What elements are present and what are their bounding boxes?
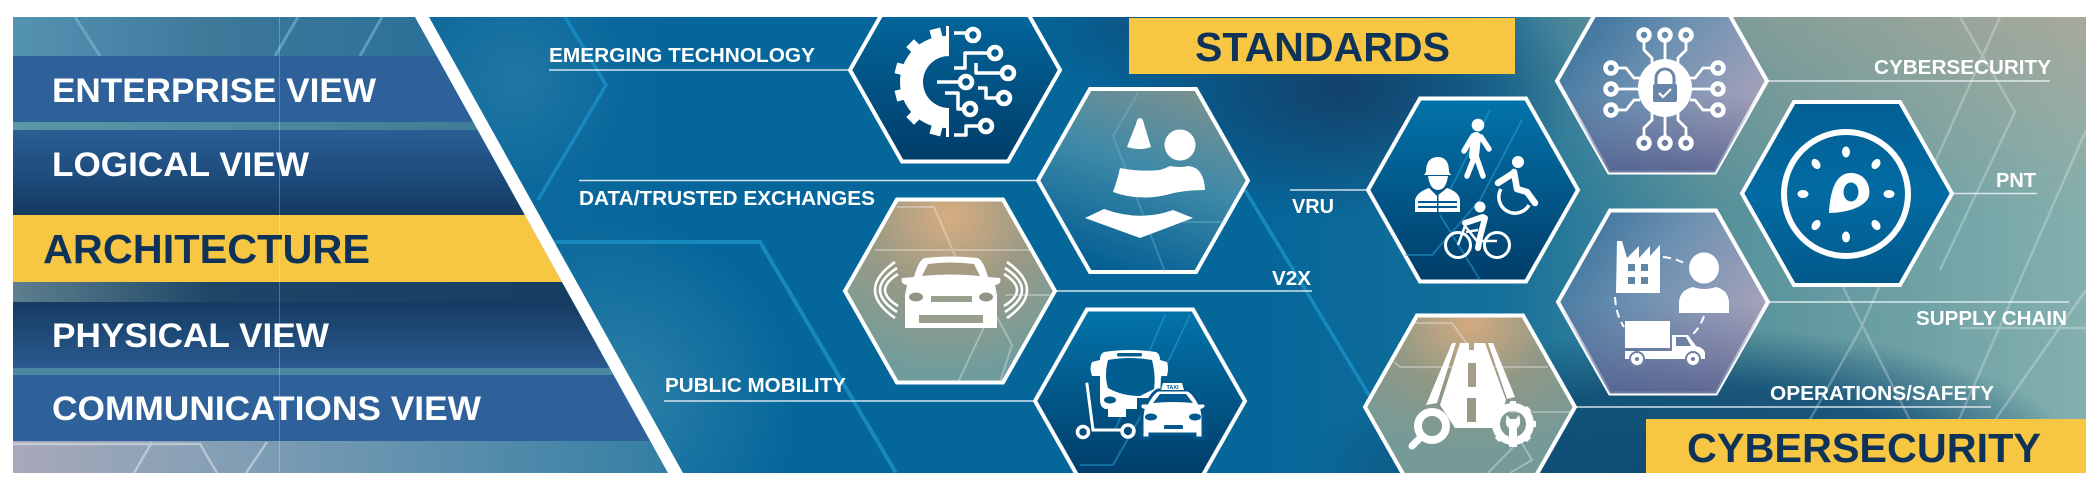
label: data/trusted exchanges: DATA/TRUSTED EXCHANGES bbox=[579, 187, 875, 210]
bar: communications view bbox=[13, 375, 693, 441]
hexagon: operations and safety bbox=[1365, 316, 1575, 476]
label: vru bbox=[1290, 189, 1366, 213]
callout: standards bbox=[1129, 18, 1515, 74]
callout: standards: STANDARDS bbox=[1195, 24, 1450, 70]
pedestrian bbox=[1464, 119, 1489, 176]
hexagon: cybersecurity bbox=[1557, 14, 1767, 172]
icon: factory, person, truck bbox=[1615, 241, 1729, 366]
hexagon: data / trusted exchanges bbox=[1038, 89, 1248, 272]
bar: enterprise view bbox=[13, 56, 473, 122]
label: vru: VRU bbox=[1292, 195, 1334, 218]
label: pnt bbox=[1954, 173, 2037, 194]
hexagon: emerging technology bbox=[850, 14, 1060, 162]
label: supply chain: SUPPLY CHAIN bbox=[1916, 307, 2067, 330]
cyclist bbox=[1446, 202, 1510, 258]
heading: enterprise view: ENTERPRISE VIEW bbox=[52, 72, 377, 110]
label: cybersecurity: CYBERSECURITY bbox=[1874, 56, 2051, 79]
construction worker bbox=[1415, 157, 1460, 212]
panel: background bbox=[415, 17, 2086, 473]
hexagon: supply chain bbox=[1558, 210, 1768, 394]
divider: white diagonal bbox=[415, 17, 683, 473]
hexagon: vru bbox=[1368, 98, 1578, 282]
hexagon: v2x bbox=[845, 200, 1055, 382]
heading: logical view: LOGICAL VIEW bbox=[52, 146, 310, 184]
icon: bus, taxi and scooter bbox=[1078, 350, 1206, 438]
heading: physical view: PHYSICAL VIEW bbox=[52, 317, 330, 355]
hexagon: pnt bbox=[1742, 102, 1952, 285]
icon: connected car bbox=[875, 256, 1027, 328]
icon: vulnerable road users bbox=[1415, 119, 1535, 258]
scooter bbox=[1078, 384, 1134, 438]
icon: circuit lock bbox=[1606, 30, 1724, 148]
label: emerging technology: EMERGING TECHNOLOGY bbox=[549, 44, 815, 67]
bar: logical view bbox=[13, 130, 525, 215]
icon: gear with circuit bbox=[896, 26, 1014, 137]
label: v2x: V2X bbox=[1272, 267, 1311, 290]
heading: communications view: COMMUNICATIONS VIEW bbox=[52, 390, 482, 428]
callout: cybersecurity: CYBERSECURITY bbox=[1687, 425, 2041, 471]
panel: architecture views bbox=[13, 17, 693, 473]
bus bbox=[1090, 350, 1168, 417]
icon: data and person bbox=[1085, 118, 1205, 238]
bar: architecture bbox=[13, 215, 562, 282]
bar: physical view bbox=[13, 302, 610, 368]
heading: architecture: ARCHITECTURE bbox=[43, 226, 370, 272]
decorative outlines bbox=[538, 17, 1372, 473]
callout: cybersecurity bbox=[1646, 419, 2086, 473]
taxi: TAXI bbox=[1166, 385, 1179, 391]
icon: road maintenance bbox=[1412, 343, 1536, 447]
wheelchair user bbox=[1498, 156, 1535, 213]
label: public mobility: PUBLIC MOBILITY bbox=[665, 374, 846, 397]
label: pnt: PNT bbox=[1996, 169, 2036, 192]
hexagon: public mobility bbox=[1035, 310, 1245, 476]
label: operations/safety: OPERATIONS/SAFETY bbox=[1770, 382, 1994, 405]
icon: navigation dial bbox=[1784, 132, 1908, 256]
